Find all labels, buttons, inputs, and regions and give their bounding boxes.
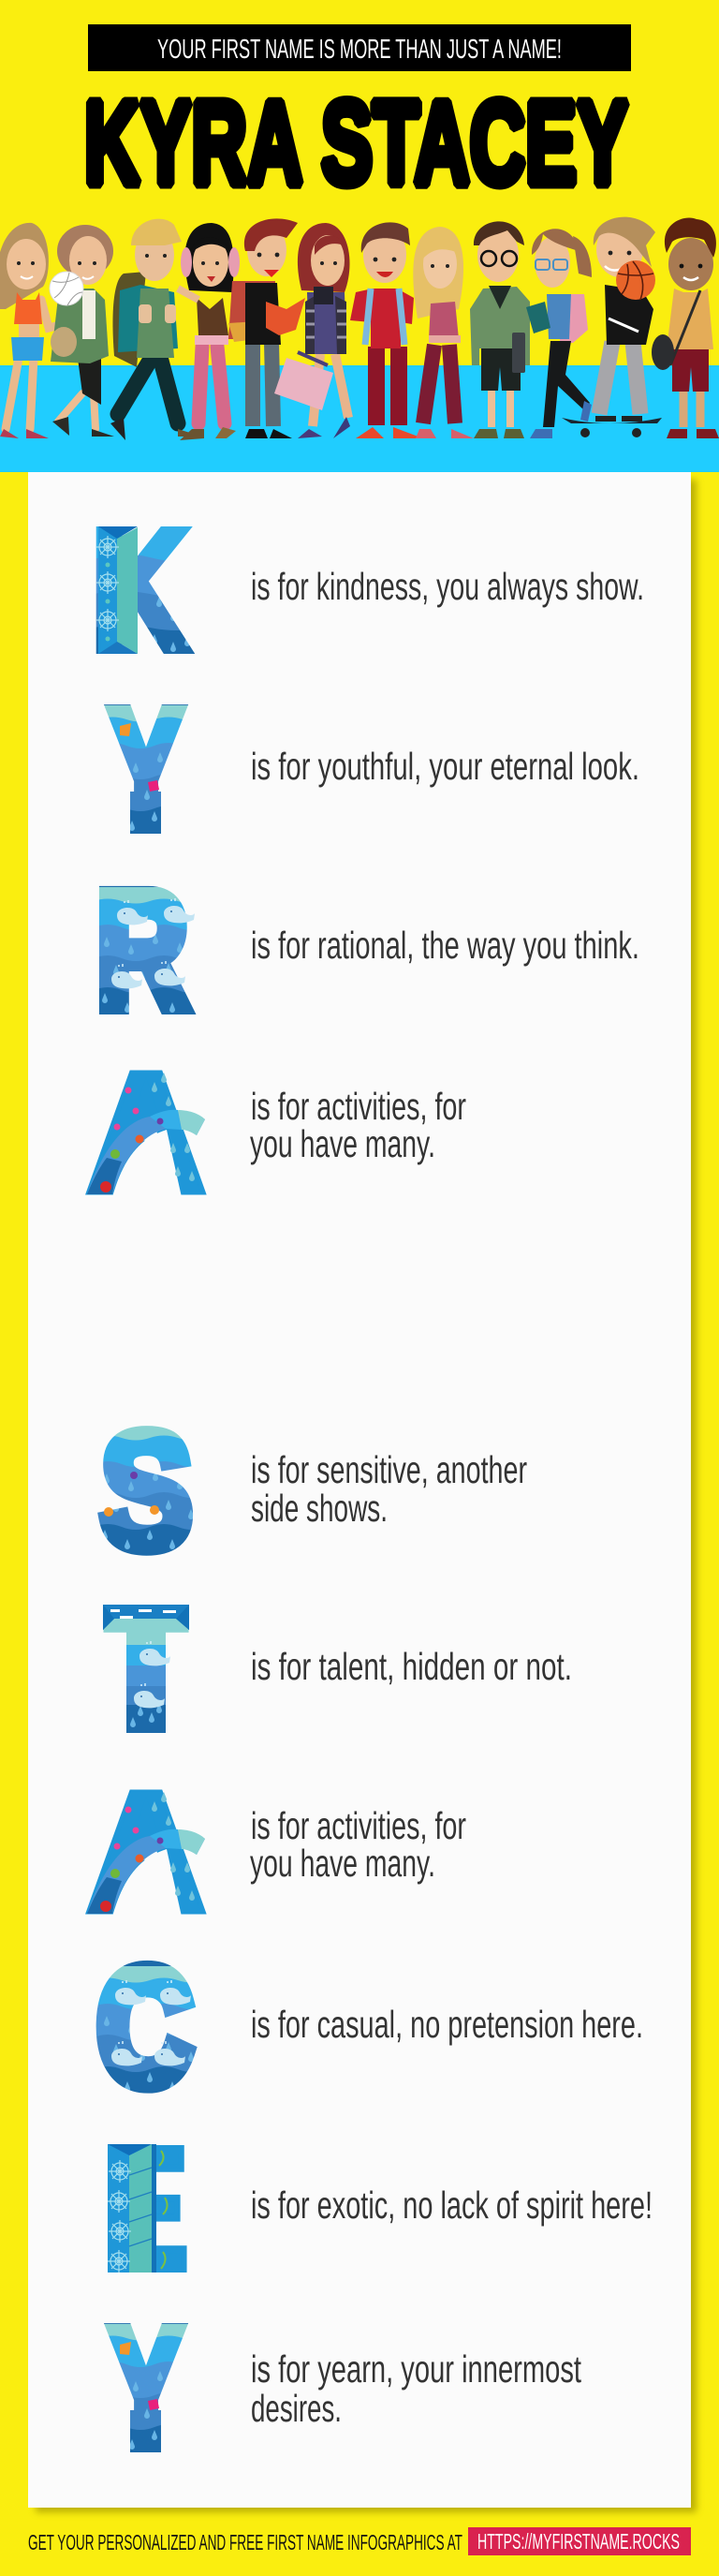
row: E [102, 2112, 653, 2306]
row: T [103, 1573, 572, 1767]
text T: is for talent, hidden or not. [251, 1645, 572, 1688]
text A: you have many. [250, 1122, 435, 1165]
panel: name meanings [28, 472, 697, 2512]
volleyball [50, 272, 83, 305]
person 12 [652, 217, 719, 438]
person 10 [526, 229, 592, 438]
letter Y: Y [110, 2294, 183, 2482]
text Y [251, 2347, 581, 2430]
person 5 [228, 218, 305, 438]
person 9 [470, 221, 530, 438]
text S: side shows. [251, 1487, 388, 1530]
letter C: C [98, 1937, 191, 2117]
basketball [616, 260, 655, 300]
row: Y [110, 675, 639, 864]
text A: is for activities, for [251, 1085, 466, 1128]
person 3 [110, 219, 202, 440]
letter Y [110, 675, 183, 864]
letter S: S [100, 1399, 193, 1583]
person 8 [413, 227, 474, 438]
footer [28, 2527, 691, 2555]
pink bag [274, 352, 333, 410]
row: K [90, 494, 644, 688]
glasses [481, 251, 517, 266]
letter Y: Y [110, 675, 183, 864]
person 7 [350, 222, 423, 438]
letter A: A [84, 1036, 208, 1230]
text A: you have many. [250, 1842, 435, 1885]
letter T: T [105, 1573, 187, 1767]
row: A [84, 1036, 466, 1230]
row: S [100, 1399, 527, 1583]
row: C [98, 1937, 643, 2117]
person 6 [274, 223, 350, 438]
text Y: is for yearn, your innermost [251, 2347, 581, 2391]
person 11 [562, 217, 662, 437]
letter E: E [102, 2112, 189, 2306]
row: Y second [110, 2294, 581, 2482]
letter K: K [90, 494, 190, 688]
letter A: A [84, 1755, 208, 1949]
text A: is for activities, for [251, 1804, 466, 1847]
glasses [536, 259, 567, 270]
skateboard [562, 418, 662, 437]
letter Y [110, 2294, 183, 2482]
text S: is for sensitive, another [251, 1448, 527, 1491]
heading strip [88, 24, 631, 71]
text S [251, 1448, 527, 1530]
person 1 [0, 223, 71, 438]
letter R: R [96, 859, 188, 1043]
person 2 [50, 225, 114, 437]
row: A second [84, 1755, 466, 1949]
text Y: desires. [251, 2387, 342, 2430]
person 4 [178, 223, 240, 440]
text A [250, 1085, 466, 1165]
text A [250, 1804, 466, 1885]
row: R [96, 859, 639, 1043]
banner: scene with students [0, 217, 719, 472]
